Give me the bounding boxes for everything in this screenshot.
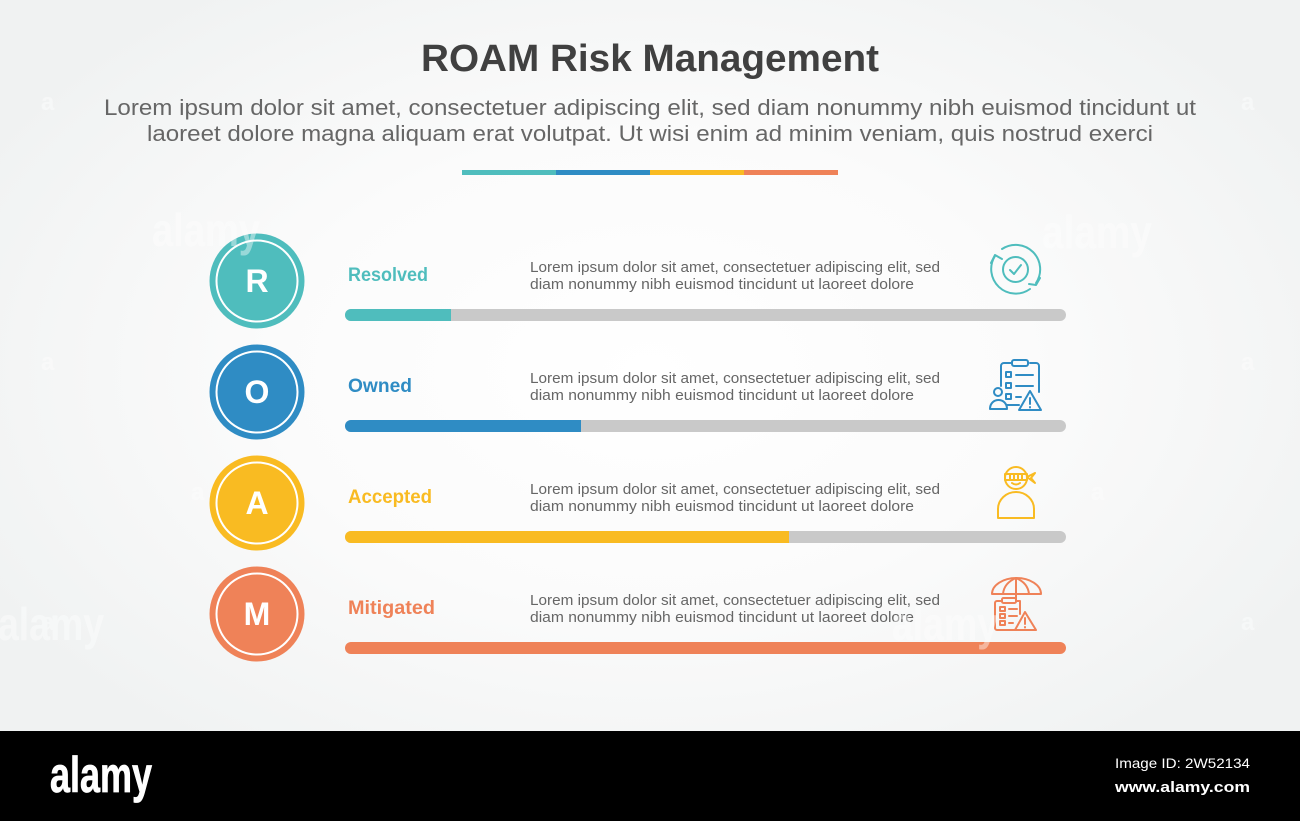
badge R: R: [245, 263, 269, 299]
watermarks: a: [1241, 349, 1255, 376]
icon: cycle with check: [991, 245, 1040, 294]
progress bar: [345, 420, 1066, 432]
title: ROAM Risk Management: [421, 38, 879, 80]
label Resolved: Resolved: [348, 265, 428, 286]
watermarks: alamy: [1042, 206, 1152, 258]
progress bar: [345, 642, 1066, 654]
watermarks: alamy: [892, 598, 998, 650]
watermarks: a: [1241, 609, 1255, 636]
label Mitigated: Mitigated: [348, 598, 435, 619]
subtitle text: laoreet dolore magna aliquam erat volutpat. Ut wisi enim ad minim veniam, quis nostrud exerci: [147, 121, 1153, 146]
row: Owned: [210, 344, 1066, 440]
row: Resolved: [210, 234, 1066, 328]
description: Lorem ipsum dolor sit amet, consectetuer adipiscing elit, sed: [530, 593, 940, 609]
progress bar: [345, 531, 1066, 543]
badge M: [210, 566, 304, 662]
image id: Image ID: 2W52134: [1115, 755, 1250, 771]
description: diam nonummy nibh euismod tincidunt ut laoreet dolore: [530, 277, 914, 293]
description: Lorem ipsum dolor sit amet, consectetuer adipiscing elit, sed: [530, 260, 940, 276]
description: diam nonummy nibh euismod tincidunt ut laoreet dolore: [530, 610, 914, 626]
description: Lorem ipsum dolor sit amet, consectetuer adipiscing elit, sed: [530, 371, 940, 387]
badge R: [210, 234, 304, 328]
watermarks: a: [41, 89, 55, 116]
badge A: [210, 456, 304, 550]
badge A: A: [245, 485, 269, 521]
alamy logo: alamy: [50, 747, 152, 803]
watermarks: alamy: [0, 598, 104, 650]
watermarks: a: [1091, 479, 1105, 506]
label Accepted: Accepted: [348, 487, 432, 508]
progress bar: [345, 309, 1066, 321]
watermarks: a: [41, 609, 55, 636]
icon: masked person: [998, 467, 1035, 518]
footer band: [0, 731, 1300, 821]
description: Lorem ipsum dolor sit amet, consectetuer adipiscing elit, sed: [530, 482, 940, 498]
four-colour divider: [462, 170, 838, 175]
badge M: M: [244, 596, 270, 632]
description: diam nonummy nibh euismod tincidunt ut laoreet dolore: [530, 388, 914, 404]
label Owned: Owned: [348, 376, 412, 397]
description: [530, 260, 940, 293]
website: www.alamy.com: [1114, 779, 1250, 796]
subtitle text: Lorem ipsum dolor sit amet, consectetuer adipiscing elit, sed diam nonummy nibh euismod tincidunt ut: [104, 95, 1197, 120]
watermarks: alamy: [152, 204, 260, 256]
description: [530, 371, 940, 404]
badge O: O: [245, 374, 269, 410]
badge O: [210, 344, 304, 440]
description: [530, 593, 940, 626]
subtitle text: [104, 95, 1197, 146]
icon: clipboard with person and warning: [990, 360, 1041, 410]
watermarks: [0, 89, 1255, 650]
watermarks: a: [1241, 89, 1255, 116]
watermarks: a: [41, 349, 55, 376]
row: Mitigated: [210, 566, 1066, 662]
watermarks: a: [191, 479, 205, 506]
description: diam nonummy nibh euismod tincidunt ut laoreet dolore: [530, 499, 914, 515]
description: [530, 482, 940, 515]
icon: umbrella over clipboard: [992, 578, 1041, 630]
row: Accepted: [210, 456, 1066, 550]
